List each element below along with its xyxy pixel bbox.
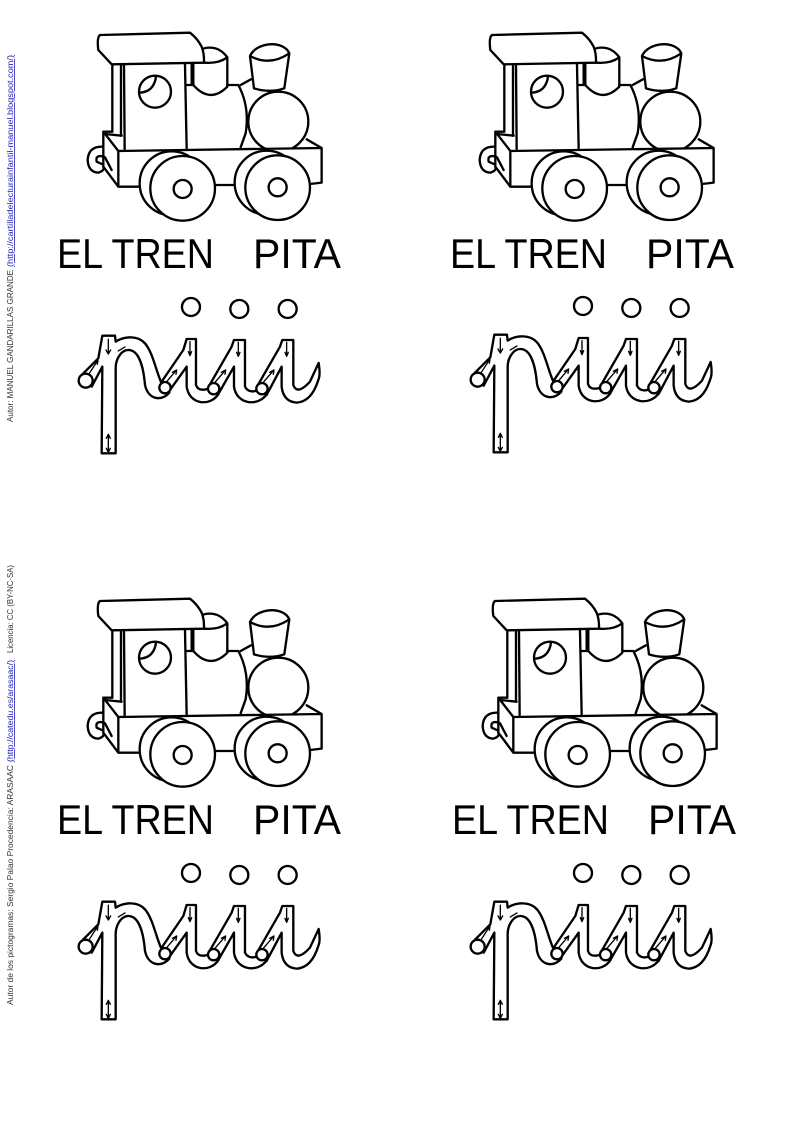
credit: pictograms vertical note: Autor de los pictogramas: Sergio Palao Procedencia: ARASAAC (6, 765, 15, 1005)
tracing letters: piii (471, 864, 712, 1019)
credit: pictograms vertical note: (http://catedu.es/arasaac/) (6, 660, 15, 762)
heading: el tren pita: PITA (253, 230, 341, 277)
icon: train (483, 599, 717, 787)
heading: el tren pita: EL TREN (57, 796, 214, 843)
heading: el tren pita (450, 230, 734, 277)
credit: author vertical note (6, 55, 15, 422)
tracing letters: piii (79, 298, 320, 453)
tracing letters: piii (79, 864, 320, 1019)
icon: train (88, 599, 322, 787)
heading: el tren pita (452, 796, 736, 843)
card: top left (57, 33, 341, 453)
heading: el tren pita: EL TREN (450, 230, 607, 277)
heading: el tren pita: PITA (253, 796, 341, 843)
credit: pictograms vertical note (6, 565, 15, 1005)
card: bottom right (452, 599, 736, 1019)
credit: pictograms vertical note: Licencia: CC (BY-NC-SA) (6, 565, 15, 653)
heading: el tren pita: PITA (646, 230, 734, 277)
heading: el tren pita (57, 796, 341, 843)
credit: author vertical note: Autor: MANUEL GANDARILLAS GRANDE (6, 270, 15, 422)
heading: el tren pita (57, 230, 341, 277)
heading: el tren pita: EL TREN (452, 796, 609, 843)
heading: el tren pita: EL TREN (57, 230, 214, 277)
card: bottom left (57, 599, 341, 1019)
icon: train (88, 33, 322, 221)
icon: train (480, 33, 714, 221)
card: top right (450, 33, 734, 452)
heading: el tren pita: PITA (648, 796, 736, 843)
tracing letters: piii (471, 297, 712, 452)
credit: author vertical note: (http://cartilladelecturainfantil-manuel.blogspot.com/) (6, 55, 15, 267)
